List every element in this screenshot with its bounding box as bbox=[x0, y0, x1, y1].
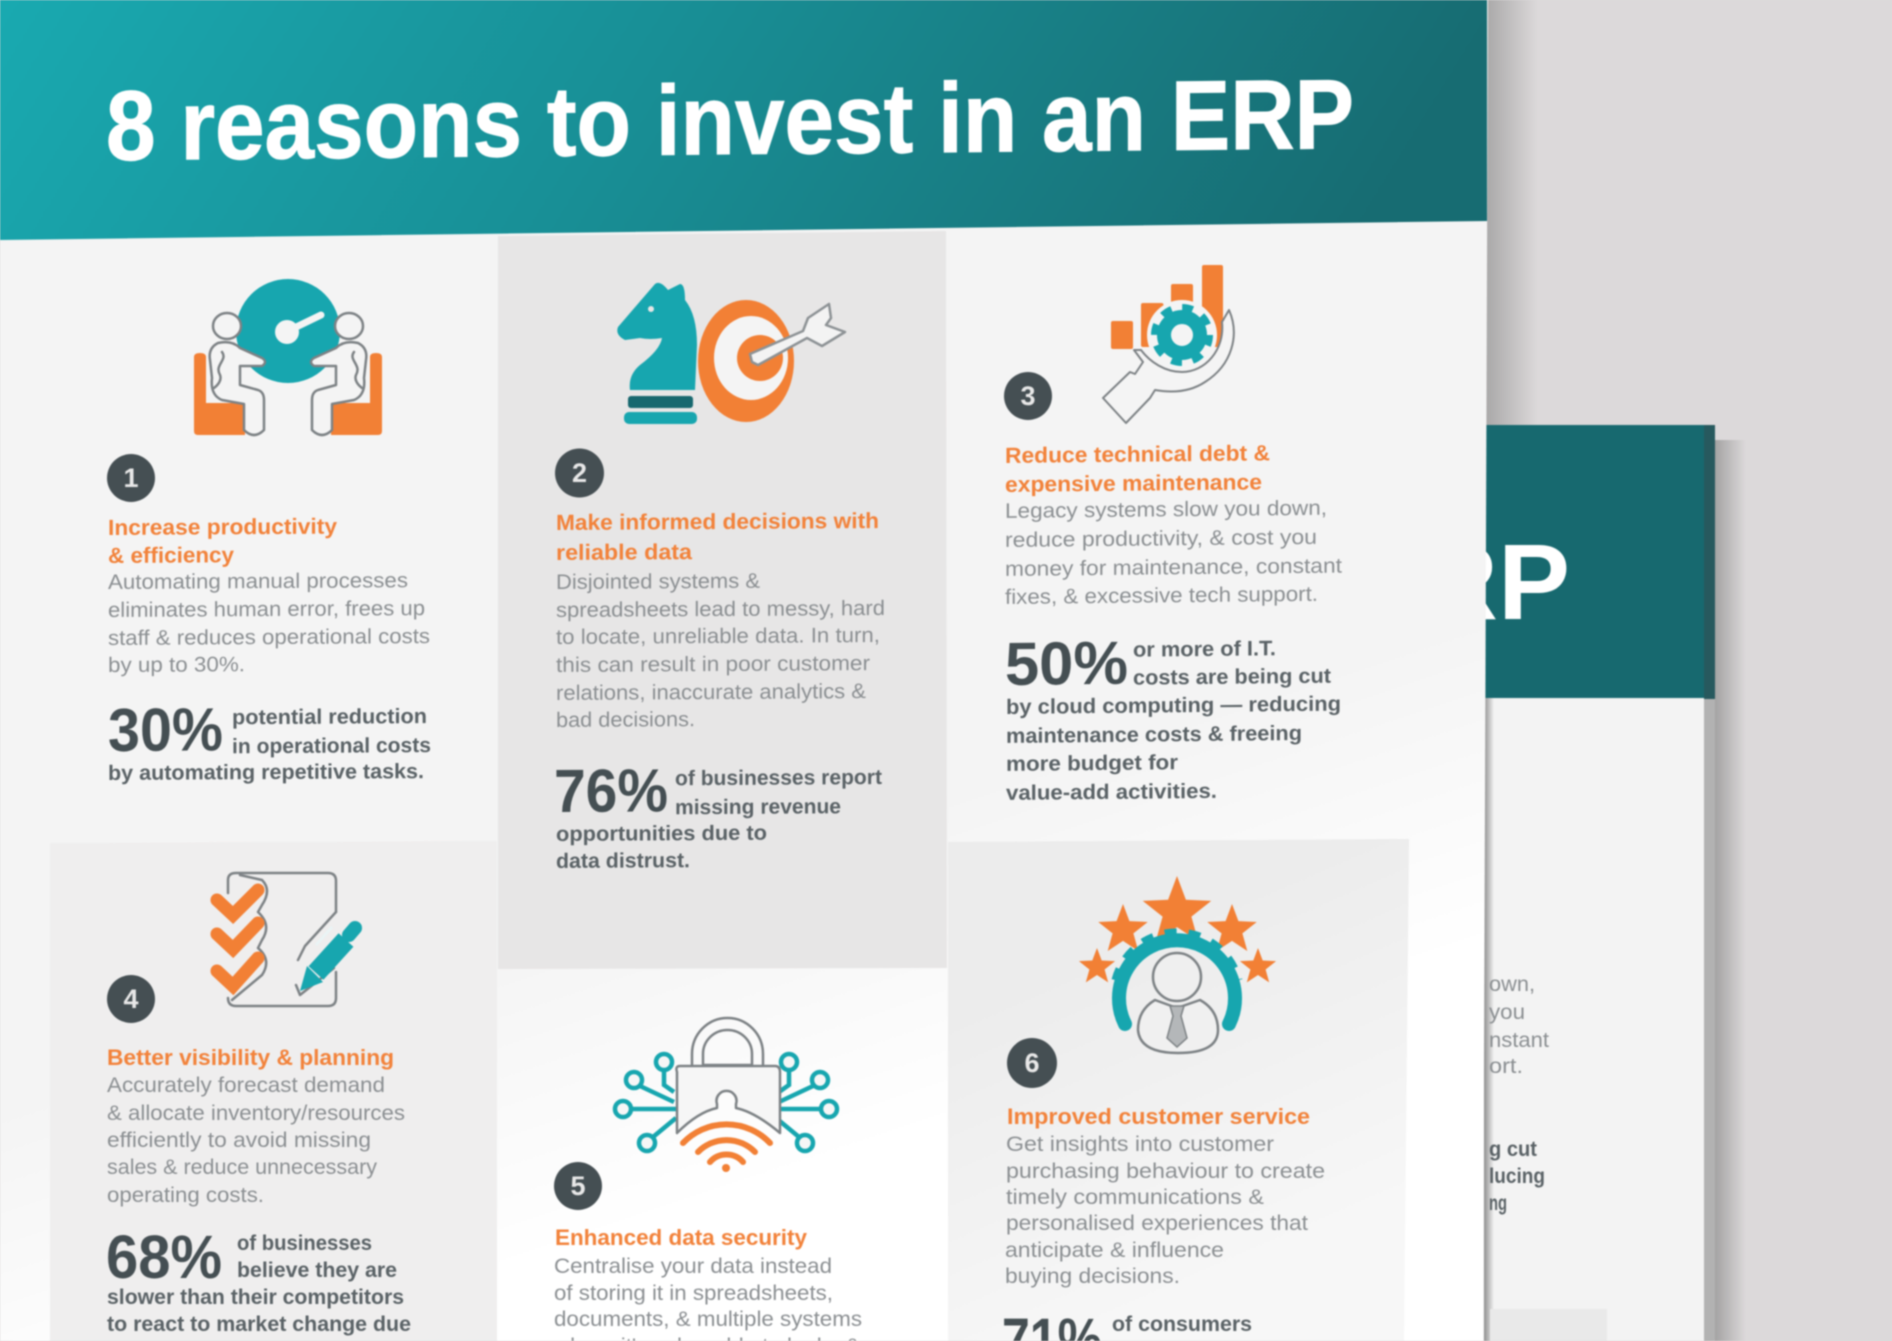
icon: gear, chart and wrench bbox=[1103, 265, 1234, 423]
body 2: Disjointed systems & bbox=[556, 570, 760, 594]
body 1: eliminates human error, frees up bbox=[108, 597, 425, 622]
body 4 bbox=[107, 1074, 405, 1207]
body 1: by up to 30%. bbox=[108, 653, 245, 677]
panel 2 background bbox=[498, 231, 947, 969]
body 4: Accurately forecast demand bbox=[107, 1074, 385, 1097]
icon: checklist and pen bbox=[217, 873, 355, 1006]
heading 1: & efficiency bbox=[108, 542, 235, 568]
body 6 bbox=[1005, 1133, 1325, 1288]
number badge 3: 3 bbox=[1020, 381, 1036, 411]
stat 6: of consumers bbox=[1112, 1313, 1252, 1336]
body 5 bbox=[553, 1255, 862, 1341]
stat 1: by automating repetitive tasks. bbox=[108, 760, 424, 785]
back page body fragments: own, bbox=[1489, 973, 1535, 996]
stat 3 bbox=[1005, 627, 1341, 805]
back page edge bbox=[1704, 699, 1715, 1341]
stat 2: of businesses report bbox=[675, 766, 882, 790]
panel 3: technical debt bbox=[1004, 265, 1342, 805]
front page shadow on background bbox=[1486, 0, 1538, 425]
text block 5 bbox=[553, 1225, 862, 1341]
panel 1: increase productivity bbox=[107, 279, 431, 785]
body 6: anticipate & influence bbox=[1005, 1239, 1224, 1262]
body 5: of storing it in spreadsheets, bbox=[554, 1282, 833, 1305]
number badge 4 bbox=[107, 975, 155, 1023]
stat 4: to react to market change due bbox=[107, 1313, 411, 1336]
body 3: reduce productivity, & cost you bbox=[1005, 526, 1317, 552]
icon: meeting gauge bbox=[194, 279, 382, 435]
number badge 2 bbox=[555, 448, 604, 498]
heading 3: Reduce technical debt & bbox=[1005, 440, 1270, 468]
stat 4: of businesses bbox=[237, 1232, 372, 1255]
number badge 5: 5 bbox=[570, 1171, 586, 1201]
stat 4: slower than their competitors bbox=[107, 1286, 404, 1309]
back page body fragments: lucing bbox=[1489, 1165, 1545, 1188]
heading 2 bbox=[556, 508, 879, 565]
body 2: bad decisions. bbox=[556, 708, 695, 732]
heading 2: Make informed decisions with bbox=[556, 508, 879, 535]
back page bbox=[1420, 425, 1746, 1341]
stat 2: missing revenue bbox=[675, 795, 841, 819]
front page shadow on back page bbox=[1484, 698, 1494, 1341]
body 2: this can result in poor customer bbox=[556, 652, 870, 677]
body 6: personalised experiences that bbox=[1006, 1212, 1308, 1235]
panel 4 background bbox=[50, 841, 497, 1341]
back page body bbox=[1480, 698, 1704, 1341]
heading 2: reliable data bbox=[556, 539, 693, 565]
back page grey panel bbox=[1490, 1309, 1607, 1341]
back page body fragments: ort. bbox=[1489, 1055, 1523, 1078]
body 6: buying decisions. bbox=[1005, 1265, 1180, 1288]
header band bbox=[0, 0, 1487, 240]
panel 4: visibility and planning bbox=[50, 841, 497, 1341]
number badge 6 bbox=[1007, 1038, 1057, 1088]
body 3 bbox=[1005, 497, 1342, 609]
header background bbox=[0, 0, 1487, 240]
back page body fragments: nstant bbox=[1489, 1029, 1549, 1052]
number badge 4: 4 bbox=[123, 984, 139, 1014]
stat 4 bbox=[106, 1223, 411, 1336]
panel 6 background bbox=[948, 839, 1409, 1341]
stat 1: 30% bbox=[108, 695, 223, 764]
body 3: fixes, & excessive tech support. bbox=[1005, 583, 1318, 609]
heading 6: Improved customer service bbox=[1007, 1104, 1310, 1129]
stat 4: 68% bbox=[106, 1223, 222, 1291]
stat 3: 50% bbox=[1005, 629, 1128, 698]
icon: stars, gear and person bbox=[1079, 876, 1276, 1053]
stat 3: more budget for bbox=[1006, 751, 1178, 776]
body 2: to locate, unreliable data. In turn, bbox=[556, 624, 880, 649]
number badge 3 bbox=[1004, 372, 1052, 420]
stat 3: maintenance costs & freeing bbox=[1006, 722, 1302, 748]
number badge 1: 1 bbox=[123, 463, 139, 493]
stat 3: costs are being cut bbox=[1133, 665, 1331, 690]
panel 6: customer service bbox=[948, 839, 1409, 1341]
text block 2 bbox=[554, 508, 885, 873]
back page shadow bbox=[1714, 440, 1746, 1341]
stat 6 bbox=[1002, 1306, 1252, 1341]
heading 4: Better visibility & planning bbox=[107, 1045, 394, 1070]
heading 3 bbox=[1005, 440, 1270, 497]
panel 5: data security bbox=[553, 1018, 862, 1341]
body 2 bbox=[556, 569, 885, 732]
stat 2: opportunities due to bbox=[556, 822, 767, 846]
body 5: Centralise your data instead bbox=[554, 1255, 832, 1278]
front page bbox=[0, 0, 1488, 1341]
icon: knight and target bbox=[617, 283, 845, 424]
stat 2: 76% bbox=[554, 756, 668, 825]
body 6: purchasing behaviour to create bbox=[1006, 1160, 1325, 1183]
stat 1 bbox=[108, 694, 431, 785]
body 4: efficiently to avoid missing bbox=[107, 1129, 371, 1152]
number badge 2: 2 bbox=[572, 458, 587, 488]
number badge 6: 6 bbox=[1024, 1048, 1040, 1078]
body 1: staff & reduces operational costs bbox=[108, 625, 430, 650]
icon: padlock, circuit and wifi bbox=[615, 1018, 837, 1172]
back page body fragments bbox=[1489, 973, 1549, 1215]
body 2: spreadsheets lead to messy, hard bbox=[556, 597, 885, 622]
panel 2: informed decisions bbox=[498, 231, 947, 969]
stat 1: in operational costs bbox=[232, 734, 431, 758]
stat 2: data distrust. bbox=[556, 849, 690, 873]
back page body fragments: g cut bbox=[1489, 1138, 1537, 1161]
stat 3: value-add activities. bbox=[1006, 780, 1217, 805]
stat 1: potential reduction bbox=[232, 705, 427, 729]
stat 4: believe they are bbox=[237, 1259, 397, 1282]
body 1 bbox=[108, 569, 430, 677]
stat 2 bbox=[554, 755, 882, 873]
text block 3 bbox=[1005, 440, 1342, 805]
body 3: money for maintenance, constant bbox=[1005, 555, 1342, 581]
text block 6 bbox=[1002, 1104, 1325, 1341]
back page fold bbox=[1704, 425, 1715, 699]
body 6: timely communications & bbox=[1006, 1186, 1264, 1209]
heading 1 bbox=[108, 514, 338, 568]
body 2: relations, inaccurate analytics & bbox=[556, 680, 866, 705]
heading 1: Increase productivity bbox=[108, 514, 338, 540]
number badge 1 bbox=[107, 454, 155, 502]
heading 5: Enhanced data security bbox=[555, 1225, 808, 1250]
body 6: Get insights into customer bbox=[1006, 1133, 1274, 1156]
body 5: documents, & multiple systems bbox=[554, 1308, 862, 1331]
heading 3: expensive maintenance bbox=[1005, 469, 1262, 497]
body 4: operating costs. bbox=[107, 1184, 264, 1207]
back page title fragment: RP bbox=[1420, 521, 1570, 642]
back page body fragments: you bbox=[1489, 1001, 1525, 1024]
back page body fragments: ng bbox=[1489, 1192, 1507, 1215]
stat 3: by cloud computing — reducing bbox=[1006, 693, 1341, 719]
back page header bbox=[1480, 425, 1704, 698]
number badge 5 bbox=[554, 1162, 602, 1210]
body 4: & allocate inventory/resources bbox=[107, 1102, 405, 1125]
text block 4 bbox=[106, 1045, 411, 1336]
body 3: Legacy systems slow you down, bbox=[1005, 497, 1327, 523]
body 1: Automating manual processes bbox=[108, 569, 408, 594]
text block 1 bbox=[108, 513, 431, 785]
body 4: sales & reduce unnecessary bbox=[107, 1156, 378, 1179]
title: 8 reasons to invest in an ERP bbox=[106, 58, 1354, 181]
stat 3: or more of I.T. bbox=[1133, 637, 1276, 662]
